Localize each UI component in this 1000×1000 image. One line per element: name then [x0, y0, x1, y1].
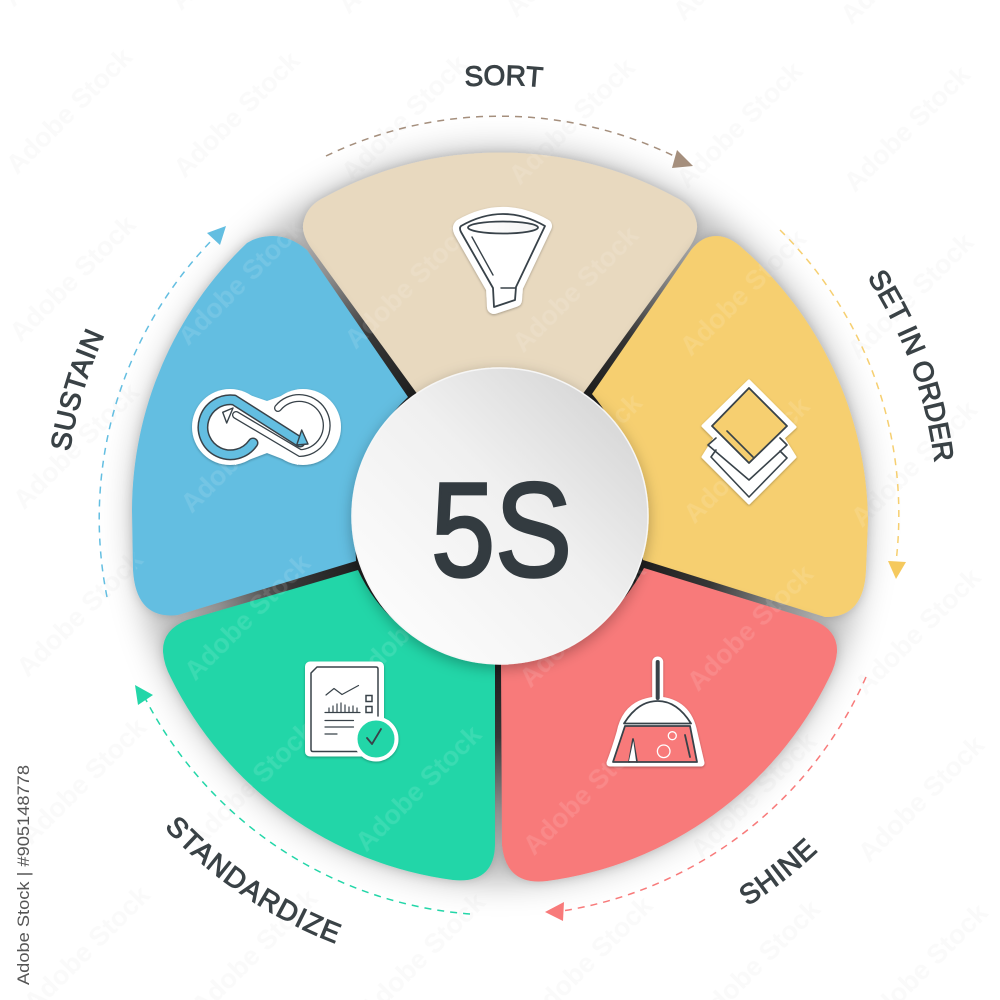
- segment: set in order: [592, 236, 868, 617]
- label: sort: SORT: [465, 64, 544, 87]
- icon: report document with check: [305, 662, 396, 760]
- arrow: standardize: [135, 685, 470, 914]
- segment: sustain: [132, 236, 408, 615]
- arrow: sustain: [99, 226, 226, 597]
- segment: sort: [303, 152, 697, 395]
- label: set in order: SET IN ORDER: [870, 270, 954, 462]
- icon: infinity loop: [192, 389, 341, 465]
- arrow: set in order: [780, 230, 906, 579]
- label: shine: SHINE: [740, 837, 818, 904]
- label: sustain: SUSTAIN: [51, 328, 104, 450]
- segment: standardize: [163, 570, 495, 880]
- center circle: [352, 368, 648, 664]
- wheel shadow halo: [134, 150, 866, 882]
- arrow: sort: [326, 116, 693, 168]
- arrow: shine: [545, 677, 866, 921]
- label: standardize: STANDARDIZE: [166, 817, 342, 944]
- segment: shine: [501, 568, 837, 882]
- title: 5S: 5S: [431, 456, 572, 605]
- stock credit: Adobe Stock | #905148778: [14, 765, 33, 985]
- icon: broom: [610, 662, 701, 763]
- dark gaps between segments: [170, 186, 830, 846]
- icon: stacked layers: [703, 381, 795, 503]
- icon: funnel: [460, 214, 545, 307]
